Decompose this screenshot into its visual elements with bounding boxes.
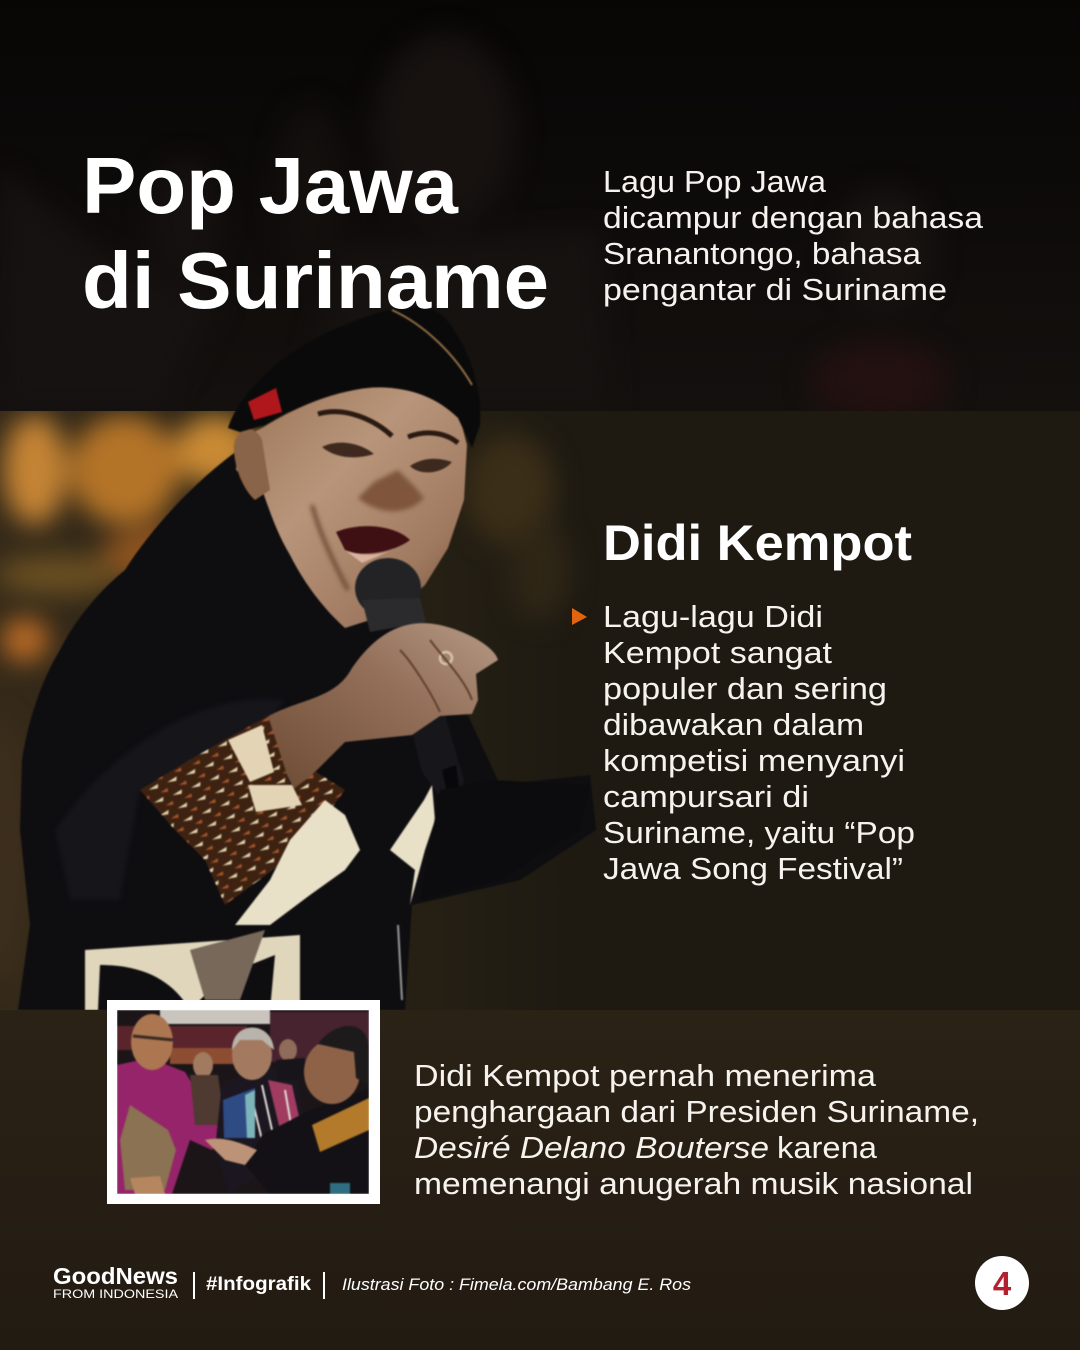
bullet text block: Suriname, yaitu “Pop — [603, 815, 915, 850]
cheek crease — [312, 505, 348, 590]
background man — [193, 1052, 213, 1078]
panel: bottom section background — [0, 1010, 1080, 1350]
description text block: karena — [777, 1130, 878, 1165]
middle man — [215, 1096, 225, 1140]
heading: Didi Kempot: Didi Kempot — [603, 515, 912, 571]
microphone body — [414, 716, 463, 793]
footer hashtag: #Infografik — [206, 1274, 311, 1295]
photo: Didi Kempot singing — [18, 307, 596, 1010]
intro text block — [603, 164, 984, 307]
intro text block: Lagu Pop Jawa — [603, 164, 827, 199]
left man — [117, 1058, 225, 1194]
open mouth — [336, 526, 410, 554]
intro text block: Sranantongo, bahasa — [603, 236, 922, 271]
description text block: Desiré Delano Bouterse — [414, 1130, 769, 1165]
bullet text block: populer dan sering — [603, 671, 887, 706]
panel: middle section with stage lights — [0, 411, 1080, 1010]
logo: GoodNews from Indonesia: GoodNews — [53, 1263, 178, 1289]
title: di Suriname — [82, 236, 549, 325]
right sleeve — [433, 780, 524, 824]
face — [236, 387, 467, 628]
bullet text block: kompetisi menyanyi — [603, 743, 905, 778]
nose shadow — [358, 470, 424, 511]
framed photo: award ceremony — [107, 1000, 380, 1204]
title: Pop Jawa — [82, 141, 459, 230]
photo credit: Ilustrasi Foto : Fimela.com/Bambang E. Ros — [342, 1275, 692, 1294]
hair orange edge — [65, 470, 300, 720]
description text block: Didi Kempot pernah menerima — [414, 1058, 877, 1093]
bullet text block — [603, 599, 915, 886]
eyebrows and eyes — [318, 412, 392, 436]
ear — [234, 429, 270, 500]
microphone head — [354, 557, 422, 609]
batik cuff — [140, 716, 345, 905]
woman in background — [279, 1039, 297, 1061]
batik wayang face left — [235, 800, 360, 925]
sleeve highlight — [55, 699, 285, 900]
intro text block: dicampur dengan bahasa — [603, 200, 984, 235]
logo: GoodNews from Indonesia — [53, 1263, 178, 1301]
bullet text block: Kempot sangat — [603, 635, 832, 670]
bullet text block: campursari di — [603, 779, 809, 814]
black jacket — [18, 445, 596, 1010]
right man Didi Kempot — [245, 1088, 369, 1194]
trophy — [223, 1088, 255, 1138]
batik bottom panel — [85, 935, 300, 1010]
icon: orange bullet triangle — [572, 608, 587, 625]
description text block: penghargaan dari Presiden Suriname, — [414, 1094, 979, 1129]
description text block — [414, 1058, 979, 1201]
intro text block: pengantar di Suriname — [603, 272, 947, 307]
hand — [265, 623, 498, 792]
shaking hands — [205, 1139, 257, 1165]
logo: GoodNews from Indonesia: FROM INDONESIA — [53, 1287, 178, 1301]
footer hashtag — [193, 1272, 325, 1299]
bullet text block: dibawakan dalam — [603, 707, 864, 742]
bullet text block: Jawa Song Festival” — [603, 851, 903, 886]
bullet text block: Lagu-lagu Didi — [603, 599, 823, 634]
hat — [228, 307, 480, 448]
panel: top dark background photo — [0, 46, 1080, 411]
page number badge: 4 — [993, 1265, 1012, 1302]
title — [82, 141, 549, 325]
batik wayang face right — [390, 785, 435, 905]
batik cream accents — [228, 725, 302, 812]
page number badge — [975, 1256, 1029, 1310]
description text block: memenangi anugerah musik nasional — [414, 1166, 973, 1201]
